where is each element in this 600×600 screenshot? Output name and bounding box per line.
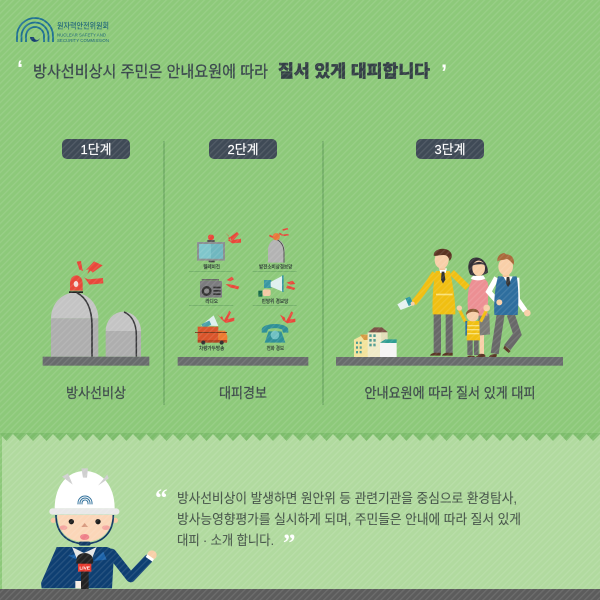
civil defense loudspeaker icon: 민방위 경보망 xyxy=(262,298,289,305)
column divider 1 xyxy=(164,141,165,405)
step 1 caption: 방사선비상 xyxy=(66,385,126,401)
siren xyxy=(69,275,83,293)
logo: nuclear safety and security commission: 원자력안전위원회 xyxy=(57,20,109,30)
child in yellow striped top xyxy=(457,305,490,357)
step 1 badge xyxy=(62,139,130,159)
radio icon: 라디오 xyxy=(205,298,218,305)
LIVE microphone: LIVE xyxy=(79,566,91,572)
step 2 illustration: alert channels xyxy=(178,229,308,366)
bottom bar xyxy=(0,589,600,600)
small dome xyxy=(106,312,141,357)
body in navy suit xyxy=(41,547,157,588)
step 3 caption: 안내요원에 따라 질서 있게 대피 xyxy=(364,385,536,401)
step 2 badge: 2단계 xyxy=(228,142,258,157)
paragraph xyxy=(177,491,521,548)
opening quote marks: “ xyxy=(155,485,168,512)
white safety helmet xyxy=(49,468,119,515)
head and face xyxy=(51,515,118,546)
step 2 badge xyxy=(209,139,277,159)
logo: nuclear safety and security commission: SECURITY COMMISSION xyxy=(57,38,109,44)
guide in yellow jacket with megaphone xyxy=(397,249,468,356)
siren truck icon: 차량가두방송 xyxy=(199,345,225,352)
closing quote mark: ’ xyxy=(441,60,447,85)
lower panel with zigzag edge xyxy=(0,428,600,600)
title xyxy=(17,56,447,85)
telephone icon: 전화 경보 xyxy=(267,345,284,352)
logo: nuclear safety and security commission xyxy=(17,18,109,44)
paragraph: 대피 · 소개 합니다. xyxy=(177,533,274,548)
column divider 2 xyxy=(322,141,324,405)
television icon: 텔레비전 xyxy=(203,264,220,271)
reporter character xyxy=(41,468,157,589)
ground bar xyxy=(336,357,563,366)
alert sparks xyxy=(77,261,103,285)
large dome xyxy=(51,293,98,357)
step 3 illustration: guide leading family xyxy=(336,249,563,366)
step 3 badge: 3단계 xyxy=(434,142,466,157)
plant siren icon: 발전소비상경보망 xyxy=(259,264,293,271)
title regular text: 방사선비상시 주민은 안내요원에 따라 xyxy=(33,63,268,81)
title bold text: 질서 있게 대피합니다 xyxy=(278,62,430,81)
opening quote mark: ‘ xyxy=(17,56,23,81)
logo: nuclear safety and security commission: NUCLEAR SAFETY AND xyxy=(57,33,106,39)
list dividers xyxy=(189,271,297,305)
quote body text xyxy=(155,485,521,557)
paragraph: 방사선비상이 발생하면 원안위 등 관련기관을 중심으로 환경탐사, xyxy=(177,491,517,506)
paragraph: 방사능영향평가를 실시하게 되며, 주민들은 안내에 따라 질서 있게 xyxy=(177,512,521,527)
ground bar xyxy=(178,357,308,366)
closing quote marks: ” xyxy=(283,530,296,557)
step 3 badge xyxy=(416,139,484,159)
ground bar xyxy=(43,357,149,366)
father in blue vest xyxy=(489,253,531,357)
step 1 illustration: nuclear plant with siren xyxy=(43,261,149,366)
step 1 badge: 1단계 xyxy=(80,142,112,157)
mother in pink sweater xyxy=(468,258,490,357)
houses xyxy=(354,327,397,357)
step 2 caption: 대피경보 xyxy=(219,385,267,401)
